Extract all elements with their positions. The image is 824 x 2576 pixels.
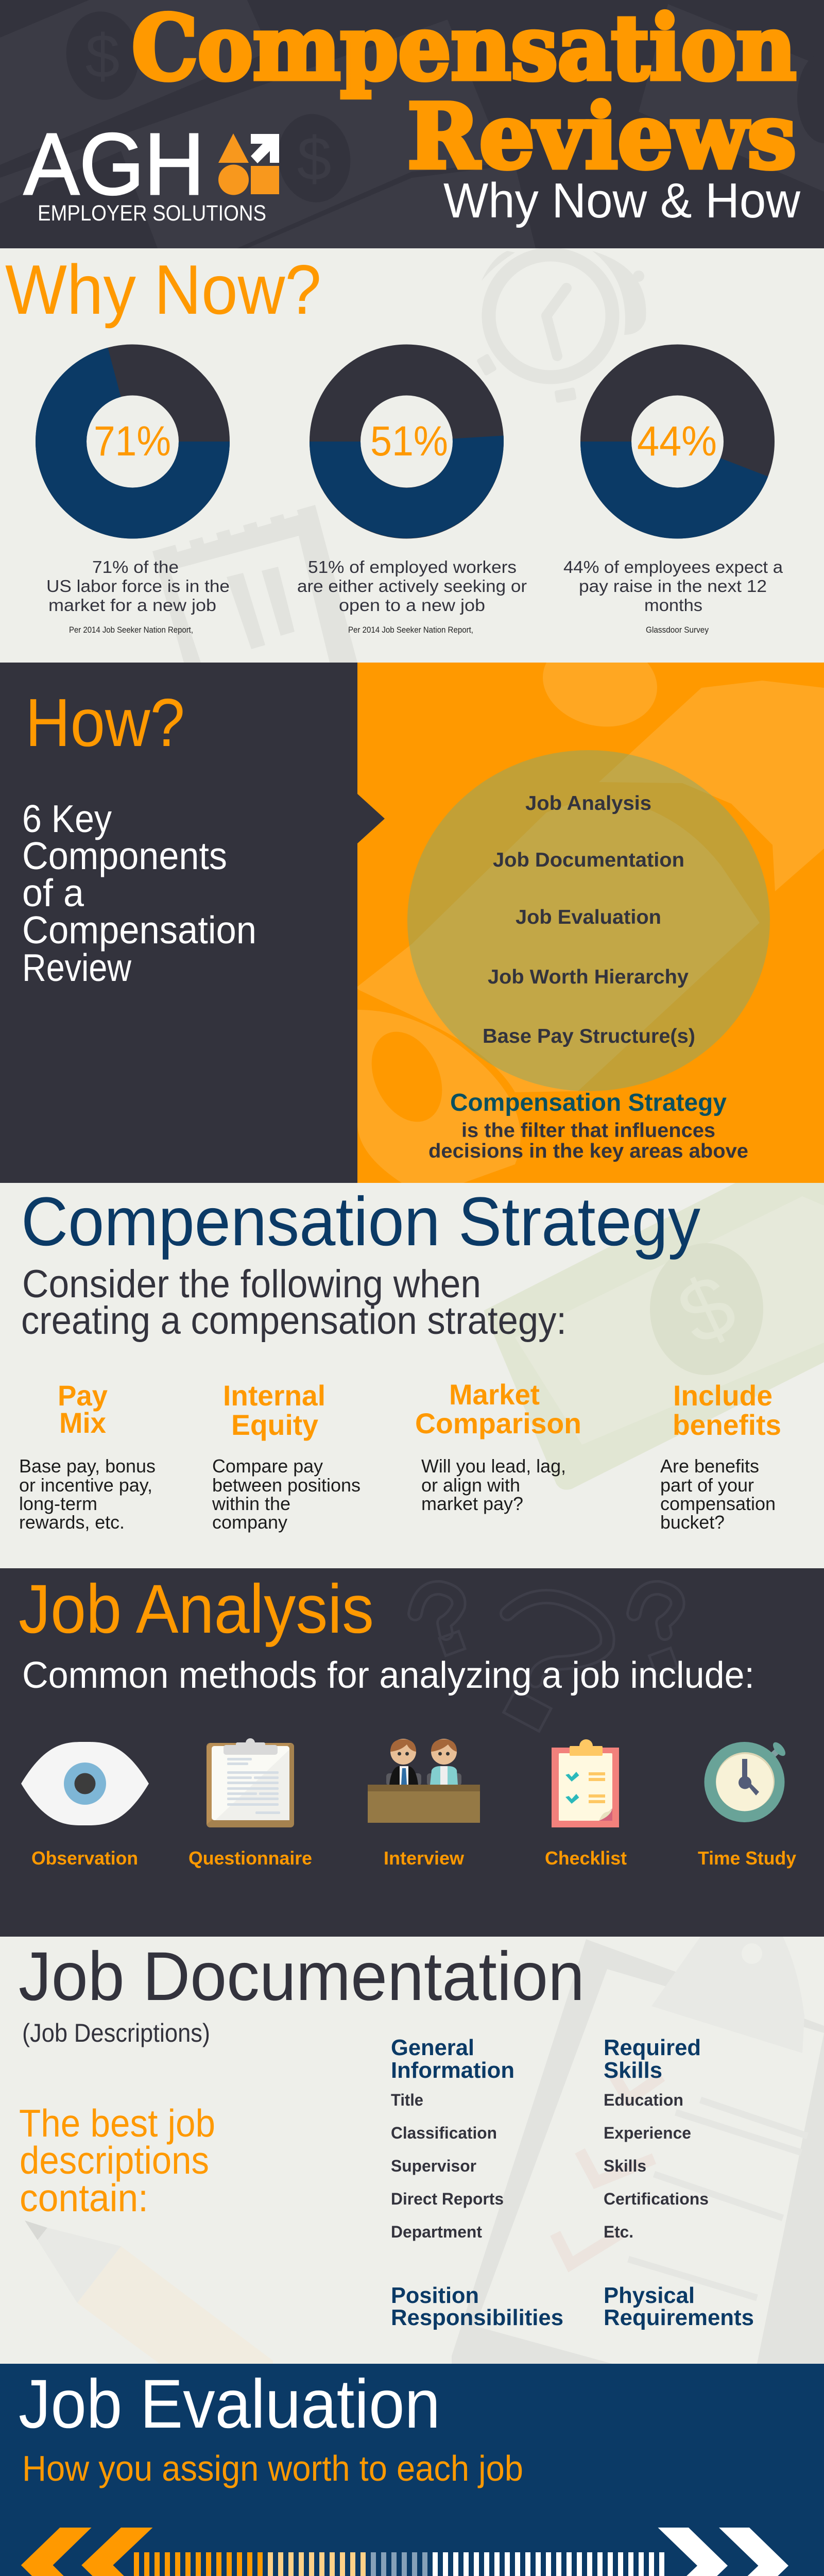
chart: donut 71%: 71% <box>94 418 171 465</box>
filter ellipse with key areas: Job Evaluation <box>516 906 661 928</box>
text block: intro: Common methods for analyzing a job include: <box>22 1655 754 1696</box>
list: general information: Title <box>391 2091 423 2109</box>
item: market comparison: Market <box>449 1378 540 1411</box>
panel: compensation strategy <box>0 1183 824 1568</box>
text block: intro <box>21 1262 566 1343</box>
item: internal equity: between positions <box>212 1475 360 1496</box>
icon: checklist <box>552 1739 619 1827</box>
subheading: job descriptions: (Job Descriptions) <box>22 2019 210 2047</box>
item: market comparison: Comparison <box>415 1407 581 1439</box>
subtitle: Why Now & How <box>443 173 801 228</box>
label: position responsibilities: Position <box>391 2283 479 2308</box>
icon: question mark watermarks <box>415 1588 678 1731</box>
label: observation: Observation <box>31 1848 138 1869</box>
heading: how: How? <box>25 685 185 760</box>
heading: job documentation: Job Documentation <box>19 1938 585 2015</box>
panel: header: $ <box>85 22 119 91</box>
text block: 44% stat: pay raise in the next 12 <box>579 577 767 596</box>
filter ellipse with key areas: Job Worth Hierarchy <box>488 966 689 988</box>
logo <box>24 115 279 226</box>
list: general information: General <box>391 2035 474 2060</box>
item: pay mix: Mix <box>59 1406 106 1439</box>
icon: calendar watermark <box>152 501 357 663</box>
heading: job analysis: Job Analysis <box>19 1571 374 1648</box>
logo: AGH <box>24 115 204 213</box>
text block: 44% stat: Glassdoor Survey <box>646 625 709 635</box>
heading: job evaluation: Job Evaluation <box>19 2366 440 2443</box>
label: time study: Time Study <box>698 1848 796 1869</box>
list: general information: Information <box>391 2058 514 2083</box>
text block: best job descriptions <box>19 2102 215 2219</box>
label: physical requirements <box>604 2283 754 2330</box>
text block: 44% stat: 44% of employees expect a <box>563 557 783 577</box>
item: market comparison <box>415 1378 581 1514</box>
label: questionnaire: Questionnaire <box>188 1848 312 1869</box>
heading: why now: Why Now? <box>5 250 321 329</box>
text block: best job descriptions: descriptions <box>20 2139 209 2182</box>
item: pay mix: Base pay, bonus <box>19 1455 156 1477</box>
text block: 44% stat: months <box>644 596 702 615</box>
label: position responsibilities <box>391 2283 563 2330</box>
list: required skills: Certifications <box>604 2190 709 2208</box>
heading: compensation strategy: Compensation Strategy <box>21 1183 700 1260</box>
label: position responsibilities: Responsibilities <box>391 2305 563 2330</box>
chart: donut 51%: 51% <box>370 418 448 465</box>
filter ellipse with key areas: Job Analysis <box>525 792 651 815</box>
list: required skills: Etc. <box>604 2223 633 2241</box>
icon: observation eye <box>21 1742 149 1825</box>
item: market comparison: or align with <box>421 1475 520 1496</box>
item: market comparison: market pay? <box>421 1493 523 1514</box>
list: general information: Classification <box>391 2124 497 2142</box>
subheading: How you assign worth to each job <box>22 2448 523 2488</box>
text block: 6 key components: Compensation <box>22 908 256 952</box>
text block: 71% stat: market for a new job <box>48 596 216 615</box>
title <box>132 0 796 189</box>
icon: stopwatch <box>705 1740 787 1822</box>
arrow: left chevrons <box>21 2528 152 2576</box>
item: pay mix: long-term <box>19 1493 97 1514</box>
text block: 44% stat <box>563 557 783 635</box>
list: required skills <box>604 2035 709 2241</box>
label: physical requirements: Physical <box>604 2283 695 2308</box>
panel: job evaluation <box>0 2364 824 2576</box>
item: internal equity: within the <box>212 1493 290 1514</box>
item: include benefits: compensation <box>660 1493 776 1514</box>
item: market comparison: Will you lead, lag, <box>421 1455 566 1477</box>
panel: job documentation <box>0 1937 824 2364</box>
panel: header <box>23 9 800 228</box>
label: physical requirements: Requirements <box>604 2305 754 2330</box>
panel: why now <box>0 248 824 663</box>
list: general information: Supervisor <box>391 2157 476 2175</box>
text block: 6 key components <box>22 797 256 989</box>
icon: money watermark <box>484 1183 824 1490</box>
chart: donut 71% <box>36 348 230 538</box>
item: pay mix <box>19 1379 156 1533</box>
icon: questionnaire clipboard <box>207 1738 294 1827</box>
item: internal equity: Internal <box>223 1379 325 1412</box>
logo: EMPLOYER SOLUTIONS <box>38 201 266 226</box>
icon: alarm clock watermark <box>476 251 646 403</box>
text block: 71% stat: Per 2014 Job Seeker Nation Report, <box>69 625 193 635</box>
item: include benefits: bucket? <box>660 1512 725 1533</box>
panel: header: $ <box>297 124 331 193</box>
list: required skills: Skills <box>604 2058 662 2083</box>
text block: 51% stat: Per 2014 Job Seeker Nation Report, <box>348 625 473 635</box>
callout: compensation strategy filter <box>428 1089 748 1162</box>
item: internal equity: company <box>212 1512 287 1533</box>
text block: 71% stat: US labor force is in the <box>46 577 230 596</box>
item: pay mix: or incentive pay, <box>19 1475 152 1496</box>
chart: donut 51% <box>310 370 504 538</box>
list: required skills: Required <box>604 2035 701 2060</box>
panel: how <box>357 629 824 1183</box>
icon: clipboard and pencil watermark <box>25 1937 824 2364</box>
label: checklist: Checklist <box>545 1848 627 1869</box>
list: general information: Direct Reports <box>391 2190 504 2208</box>
icon: money watermark: $ <box>664 1255 749 1364</box>
list: general information: Department <box>391 2223 482 2241</box>
text block: 51% stat: open to a new job <box>339 596 485 615</box>
icon: interview at desk <box>368 1739 480 1823</box>
arrow: right chevrons <box>658 2528 788 2576</box>
callout: compensation strategy filter: Compensation Strategy <box>450 1089 727 1116</box>
list: required skills: Education <box>604 2091 683 2109</box>
text block: best job descriptions: contain: <box>20 2176 148 2219</box>
item: include benefits: part of your <box>660 1475 754 1496</box>
text block: 6 key components: Review <box>22 946 132 989</box>
chart: donut 44%: 44% <box>637 418 717 465</box>
text block: best job descriptions: The best job <box>19 2102 215 2145</box>
panel: job analysis <box>0 1568 824 1937</box>
text block: intro: creating a compensation strategy: <box>21 1299 566 1343</box>
item: pay mix: rewards, etc. <box>19 1512 125 1533</box>
text block: 71% stat: 71% of the <box>92 557 179 577</box>
item: include benefits: Are benefits <box>660 1455 759 1477</box>
text block: 6 key components: Components <box>22 834 227 877</box>
filter ellipse with key areas <box>407 750 770 1091</box>
item: include benefits: benefits <box>673 1409 781 1441</box>
text block: 51% stat: are either actively seeking or <box>297 577 527 596</box>
list: required skills: Experience <box>604 2124 691 2142</box>
item: internal equity: Compare pay <box>212 1455 323 1477</box>
scale bars <box>134 2552 664 2576</box>
text block: 71% stat <box>46 557 230 635</box>
item: internal equity <box>212 1379 360 1533</box>
filter ellipse with key areas: Job Documentation <box>493 849 684 871</box>
text block: 6 key components: of a <box>22 871 84 914</box>
item: internal equity: Equity <box>231 1409 318 1441</box>
item: include benefits <box>660 1379 781 1533</box>
item: include benefits: Include <box>673 1379 772 1412</box>
callout: compensation strategy filter: is the filter that influences <box>461 1120 715 1142</box>
panel: how left column <box>0 663 385 1183</box>
list: required skills: Skills <box>604 2157 646 2175</box>
chart: donut 44% <box>580 370 768 538</box>
label: interview: Interview <box>384 1848 465 1869</box>
item: pay mix: Pay <box>58 1379 108 1412</box>
list: general information <box>391 2035 514 2241</box>
title: Reviews <box>407 84 796 189</box>
callout: compensation strategy filter: decisions in the key areas above <box>428 1140 748 1162</box>
text block: intro: Consider the following when <box>22 1262 481 1306</box>
filter ellipse with key areas: Base Pay Structure(s) <box>483 1025 695 1047</box>
text block: 51% stat: 51% of employed workers <box>308 557 517 577</box>
text block: 6 key components: 6 Key <box>22 797 112 840</box>
text block: 51% stat <box>297 557 527 635</box>
